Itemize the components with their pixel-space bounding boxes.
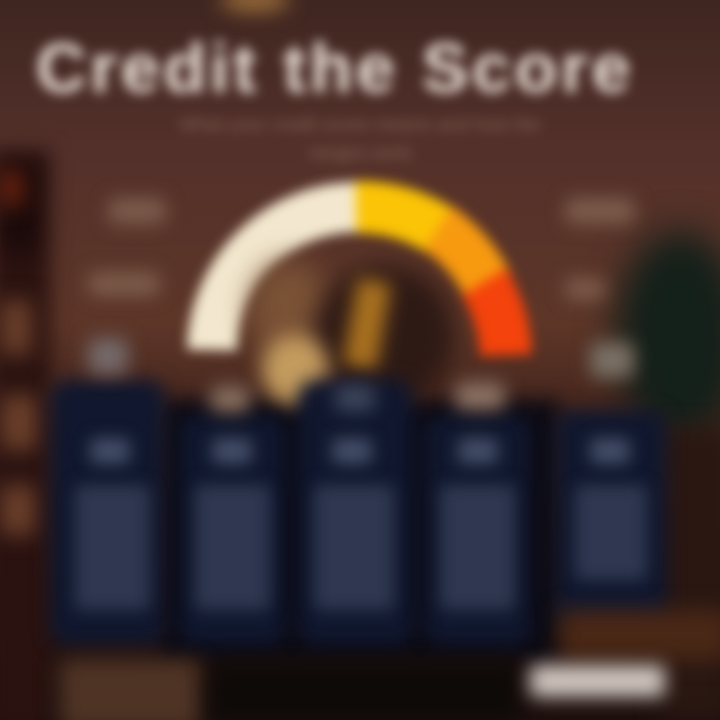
shelf objects (0, 290, 46, 546)
card 4 text (458, 438, 498, 464)
orange accent above title (220, 0, 290, 12)
card 1 text (90, 438, 130, 464)
cards row (40, 328, 672, 650)
plant at right (615, 230, 720, 440)
card 4 (425, 415, 530, 645)
card tops (88, 338, 128, 374)
title: Credit the Score (36, 29, 634, 107)
bottom right white note (530, 665, 665, 697)
gauge: yellow arc (356, 207, 442, 232)
gauge: red arc (484, 282, 506, 355)
bottom right table (560, 610, 720, 660)
card 2 (180, 415, 285, 645)
card 3 (298, 380, 413, 645)
card 5 text (590, 438, 630, 464)
right label 2 (565, 278, 605, 300)
left dark shelf (0, 150, 50, 720)
right dark column (660, 430, 720, 720)
shelf items (0, 160, 40, 250)
card 2 text (212, 438, 252, 464)
left label 1 (108, 198, 166, 224)
red glow on shelf (0, 170, 22, 206)
bottom left tan block (60, 660, 200, 720)
bottom dark band (210, 662, 520, 720)
right label 1 (565, 198, 635, 224)
brown backdrop (250, 260, 330, 360)
left label 2 (88, 272, 160, 296)
card 5 (555, 410, 667, 625)
dark hub (315, 265, 455, 405)
dark band behind cards (160, 400, 560, 660)
subtitle: What your credit score means and how the ranges work (179, 115, 541, 164)
gauge: pale arc (212, 207, 358, 350)
gold coin (262, 335, 328, 405)
gauge: orange arc (438, 228, 488, 286)
card 3 text (332, 438, 372, 464)
orange needle (343, 278, 391, 370)
card 1 (50, 380, 165, 645)
